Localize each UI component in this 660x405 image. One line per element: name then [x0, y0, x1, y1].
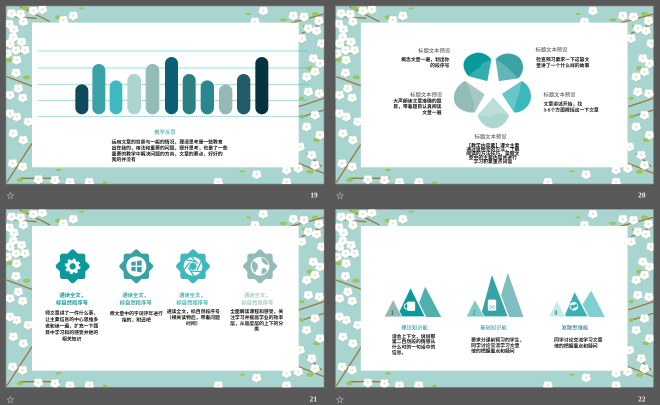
column four text: 类	[254, 326, 259, 333]
mountains group three: 3	[554, 311, 557, 317]
petal bottom	[478, 98, 509, 128]
column three text: 通读全文，标自然段序号	[167, 308, 220, 315]
floral frame	[3, 209, 326, 390]
column three text: 标自然段序号	[176, 299, 209, 307]
badge windows	[118, 248, 154, 284]
petal top right	[496, 53, 523, 81]
column one text: 师文章讲了一件什么事，	[45, 310, 98, 317]
column three text	[167, 291, 220, 327]
white panel	[32, 23, 299, 167]
column four text: 层，从高度层的上下的分	[230, 320, 283, 327]
badge globe	[242, 248, 278, 284]
heading: 教学反思	[154, 128, 176, 136]
slide 22 content	[336, 273, 646, 405]
column two text: 师文章中的字词评年进行	[110, 310, 163, 317]
footer star: ☆	[6, 191, 14, 200]
label top right: 标题文本预设	[535, 46, 568, 54]
icon: calendar: 30	[489, 304, 495, 310]
column two text: 基础知识能	[480, 324, 507, 332]
column one text: 说和读一遍，扩充一下题	[45, 322, 98, 329]
footer star: ☆	[336, 192, 344, 201]
petal top left	[464, 53, 491, 81]
column three text: 通读全文，	[179, 291, 206, 299]
slide 22 backdrop	[332, 209, 656, 390]
label right: 3-5个方面概括这一下文章	[543, 107, 599, 114]
white panel	[361, 226, 627, 371]
column two text	[471, 324, 524, 355]
icon: cup	[404, 302, 415, 311]
slide 21 content	[6, 248, 317, 405]
body text: 重要的教学中解决问题的方向，文章的要点，好好的	[112, 150, 223, 157]
column two text: 标自然段序号	[120, 299, 152, 307]
mountains group one: 1	[391, 311, 394, 317]
column one text: 信息。	[392, 349, 406, 356]
column four text: 全面解读课程和感受，关	[230, 308, 283, 315]
column one text: 什么可的一句话中的	[392, 344, 435, 351]
label left: 标题文本预设	[410, 91, 443, 99]
floral frame	[3, 5, 326, 187]
column one text: 目中学习和的感受并他的	[45, 329, 98, 336]
label top left	[401, 46, 451, 69]
column four text: 注学习并提高学业的效率	[230, 314, 283, 321]
column four text: 通读全文，	[244, 291, 271, 299]
column three text: 他的把握重点和疑问	[554, 342, 598, 349]
label right	[543, 91, 599, 114]
body text	[112, 139, 228, 163]
body text: 我的并没有	[112, 156, 136, 163]
column one text: 让主要信息的中心思维多	[45, 316, 98, 323]
white panel	[32, 226, 299, 371]
footer star: ☆	[6, 396, 14, 405]
column two text: 通读全文，	[122, 291, 149, 299]
slide 21 backdrop	[3, 209, 326, 390]
page number: 20	[638, 190, 646, 199]
column two text	[110, 291, 163, 323]
petal right	[502, 81, 531, 113]
icon: globe	[569, 302, 578, 311]
column two text: 要求分课前预习的学生，	[471, 336, 524, 343]
floral frame	[332, 209, 656, 390]
mountains group two: 2	[473, 311, 476, 317]
page number: 22	[638, 394, 646, 403]
column three text: （相关读物后，带着问题	[167, 314, 220, 321]
label left: 文章一遍	[422, 109, 442, 116]
label bottom: 阅读的方法技巧，掌握文	[466, 150, 520, 157]
label left: 目，带着题目认真阅读	[393, 103, 442, 110]
column one text: 理论知识能	[401, 324, 428, 332]
label top right: 章讲了一个什么样的故事	[536, 62, 589, 69]
label left	[393, 91, 443, 116]
label top left: 的段序号	[430, 62, 450, 69]
column three text: 同学讨论交流学习文章	[554, 337, 603, 344]
label top right: 检查预习要求一下这篇文	[536, 56, 589, 63]
badge gear	[55, 248, 91, 284]
label bottom	[466, 133, 520, 165]
label bottom: 通过说明文的方法，了解	[466, 146, 520, 153]
column one text: 第二自然段的情感从	[392, 338, 435, 345]
mountains group two	[466, 273, 523, 317]
slide 20	[332, 5, 656, 201]
label bottom: 章中的主要内容并进行	[469, 154, 517, 161]
floral frame	[332, 5, 656, 187]
mountains group one	[384, 287, 441, 317]
mountains group three	[548, 291, 605, 317]
column one text: 相关知识	[62, 336, 81, 343]
column three text	[554, 324, 603, 349]
column four text	[230, 291, 283, 333]
page number: 21	[310, 394, 317, 403]
column two text: 同学讨论交流学习文章	[471, 342, 520, 349]
column one text: 标自然段序号	[56, 299, 89, 307]
label right: 文章讲述开始，找	[543, 101, 582, 108]
label bottom: 学习积累重点词语	[474, 158, 512, 165]
label top left: 概念文章一遍，划出你	[401, 56, 450, 63]
five petal diagram	[454, 53, 531, 128]
badge aperture	[175, 248, 211, 284]
label bottom: 【教学内容要】课文主要	[466, 142, 520, 149]
column one text: 通读全文，	[59, 291, 86, 299]
page number: 19	[310, 190, 318, 199]
label top left: 标题文本预设	[418, 46, 451, 54]
column one text	[392, 324, 435, 356]
slide 19	[3, 5, 326, 200]
footer star: ☆	[336, 396, 344, 405]
body text: 出在我的，用法和重要的问题，提升思考，也是了一些	[112, 144, 228, 151]
petal left	[454, 81, 485, 113]
column three text: 发散思维能	[562, 324, 589, 332]
label right: 标题文本预设	[543, 91, 576, 99]
bar chart	[38, 51, 308, 116]
label bottom: 标题文本预设	[475, 133, 507, 141]
column one text: 请会上下文，说说那	[392, 333, 435, 340]
white panel	[361, 23, 627, 167]
column two text: 指的，附还吧	[122, 316, 151, 323]
label left: 大声朗读文章准确的题	[393, 97, 442, 104]
column one text	[45, 291, 98, 343]
label top right	[535, 46, 589, 69]
column four text: 标自然段序号	[241, 299, 274, 307]
column three text: 时间）	[186, 320, 201, 327]
body text: 运用文章的背景与一般的情况，理清思考是一些教育	[112, 139, 223, 146]
column two text: 他的把握重点和疑问	[471, 348, 515, 355]
